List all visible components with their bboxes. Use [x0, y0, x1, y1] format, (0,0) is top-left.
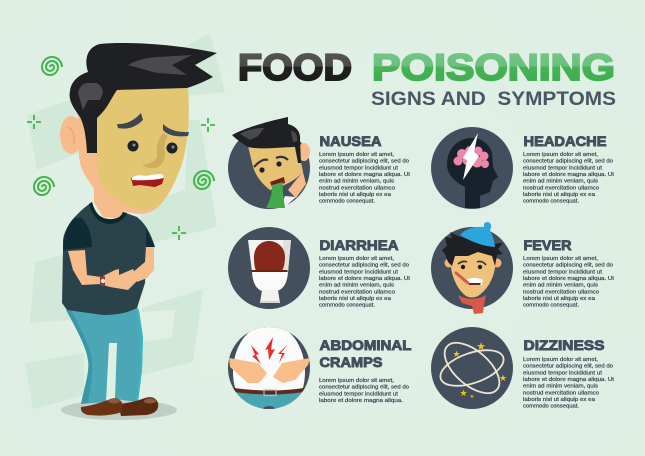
- text: dizziness description: commodo consequat.: [523, 404, 579, 410]
- text: nausea description: nostrud exercitation ullamco: [319, 185, 395, 191]
- text: abdominal cramps description: eiusmod tempor incididunt ut: [319, 391, 398, 397]
- text: abdominal cramps description: Lorem ipsum dolor sit amet,: [319, 378, 394, 384]
- man character: [60, 43, 217, 420]
- text: diarrhea description: Lorem ipsum dolor sit amet,: [319, 256, 394, 262]
- text: nausea description: consectetur adipiscing elit, sed do: [319, 159, 409, 165]
- text: dizziness description: [523, 357, 614, 410]
- text: headache description: nostrud exercitation ullamco: [523, 185, 599, 191]
- text: headache description: labore et dolore magna aliqua. Ut: [523, 172, 614, 178]
- heading: diarrhea: DIARRHEA: [320, 237, 398, 253]
- text: headache description: commodo consequat.: [523, 199, 579, 205]
- text: dizziness description: Lorem ipsum dolor sit amet,: [523, 357, 598, 363]
- text: fever description: eiusmod tempor incididunt ut: [523, 269, 602, 275]
- title: POISONING: [372, 47, 615, 88]
- text: fever description: labore et dolore magna aliqua. Ut: [523, 276, 614, 282]
- text: nausea description: laboris nisi ut aliquip ex ea: [319, 192, 392, 198]
- panel: headache: [431, 127, 614, 209]
- icon: orbit and stars: ★: [452, 350, 461, 360]
- text: dizziness description: labore et dolore magna aliqua. Ut: [523, 377, 614, 383]
- eyes: [128, 140, 178, 154]
- icon: sparkle left: [27, 115, 41, 129]
- text: headache description: enim ad minim veniam, quis: [523, 179, 598, 185]
- icon: swirl top left: [42, 57, 62, 75]
- icon: stomach cramps: [228, 327, 310, 409]
- icon: orbit and stars: ★: [470, 394, 475, 400]
- icon: orbit and stars: ★: [459, 389, 468, 399]
- trousers: [66, 308, 143, 404]
- text: diarrhea description: labore et dolore magna aliqua. Ut: [319, 276, 410, 282]
- text: dizziness description: eiusmod tempor incididunt ut: [523, 370, 602, 376]
- text: nausea description: eiusmod tempor incididunt ut: [319, 165, 398, 171]
- icon: man with ice bag: [431, 222, 513, 314]
- background zigzag shapes: [25, 33, 225, 409]
- hair: [70, 43, 217, 153]
- heading: fever: FEVER: [524, 237, 572, 253]
- shoes: [81, 397, 158, 416]
- icon: orbit and stars: [431, 327, 513, 409]
- text: fever description: commodo consequat.: [523, 303, 579, 309]
- icon: swirl lower left: [34, 177, 54, 195]
- panel: abdominal cramps: [228, 327, 412, 409]
- text: nausea description: enim ad minim veniam, quis: [319, 179, 394, 185]
- text: diarrhea description: commodo consequat.: [319, 303, 375, 309]
- panel: dizziness: [431, 327, 614, 410]
- ear: [60, 116, 82, 154]
- text: nausea description: labore et dolore magna aliqua. Ut: [319, 172, 410, 178]
- icon: toilet: [228, 227, 310, 309]
- icon: orbit and stars: ★: [499, 374, 507, 384]
- text: dizziness description: laboris nisi ut aliquip ex ea: [523, 397, 596, 403]
- face: [97, 88, 189, 209]
- wristwatch: [100, 276, 105, 286]
- text: nausea description: commodo consequat.: [319, 199, 375, 205]
- mouth: [131, 174, 164, 187]
- text: abdominal cramps description: [319, 378, 409, 404]
- text: diarrhea description: enim ad minim veniam, quis: [319, 283, 394, 289]
- icon: nausea man: [228, 117, 310, 209]
- heading: abdominal cramps: [320, 337, 412, 370]
- text: diarrhea description: laboris nisi ut aliquip ex ea: [319, 296, 392, 302]
- heading: headache: HEADACHE: [524, 133, 606, 149]
- panel: fever: [431, 222, 614, 314]
- text: fever description: Lorem ipsum dolor sit amet,: [523, 256, 598, 262]
- text: nausea description: Lorem ipsum dolor sit amet,: [319, 152, 394, 158]
- icon: swirl right: [194, 171, 214, 189]
- panel: diarrhea: [228, 227, 410, 309]
- text: fever description: [523, 256, 614, 309]
- icon: sparkle right: [201, 118, 215, 132]
- neck: [94, 185, 125, 219]
- text: dizziness description: enim ad minim veniam, quis: [523, 384, 598, 390]
- icon: orbit and stars: ★: [476, 340, 486, 353]
- text: headache description: consectetur adipiscing elit, sed do: [523, 159, 613, 165]
- icon: head with brain: [431, 127, 513, 209]
- text: fever description: enim ad minim veniam, quis: [523, 283, 598, 289]
- face skin: [78, 88, 189, 214]
- subtitle: SIGNS AND SYMPTOMS: [371, 88, 616, 110]
- text: diarrhea description: consectetur adipiscing elit, sed do: [319, 263, 409, 269]
- text: dizziness description: nostrud exercitation ullamco: [523, 390, 599, 396]
- text: dizziness description: consectetur adipiscing elit, sed do: [523, 364, 613, 370]
- heading: nausea: NAUSEA: [320, 133, 382, 149]
- title: FOOD: [238, 47, 352, 88]
- text: fever description: nostrud exercitation ullamco: [523, 289, 599, 295]
- nose: [142, 133, 168, 168]
- text: nausea description: [319, 152, 410, 205]
- text: diarrhea description: [319, 256, 410, 309]
- eyebrows: [117, 113, 189, 136]
- heading: dizziness: DIZZINESS: [524, 337, 604, 353]
- text: abdominal cramps description: consectetur adipiscing elit, sed do: [319, 385, 409, 391]
- text: headache description: laboris nisi ut aliquip ex ea: [523, 192, 596, 198]
- arms and hands: [68, 247, 154, 290]
- text: diarrhea description: eiusmod tempor incididunt ut: [319, 269, 398, 275]
- shadow: [61, 400, 177, 420]
- text: fever description: laboris nisi ut aliquip ex ea: [523, 296, 596, 302]
- heading: abdominal cramps: CRAMPS: [320, 354, 382, 370]
- text: diarrhea description: nostrud exercitation ullamco: [319, 289, 395, 295]
- text: headache description: [523, 152, 614, 205]
- text: headache description: Lorem ipsum dolor sit amet,: [523, 152, 598, 158]
- text: headache description: eiusmod tempor incididunt ut: [523, 165, 602, 171]
- icon: sparkle bottom: [172, 226, 186, 240]
- text: fever description: consectetur adipiscing elit, sed do: [523, 263, 613, 269]
- text: abdominal cramps description: labore et dolore magna aliqua.: [319, 398, 403, 404]
- panel: nausea: [228, 117, 410, 209]
- heading: abdominal cramps: ABDOMINAL: [320, 337, 412, 353]
- title: [238, 47, 615, 88]
- t-shirt: [62, 202, 155, 315]
